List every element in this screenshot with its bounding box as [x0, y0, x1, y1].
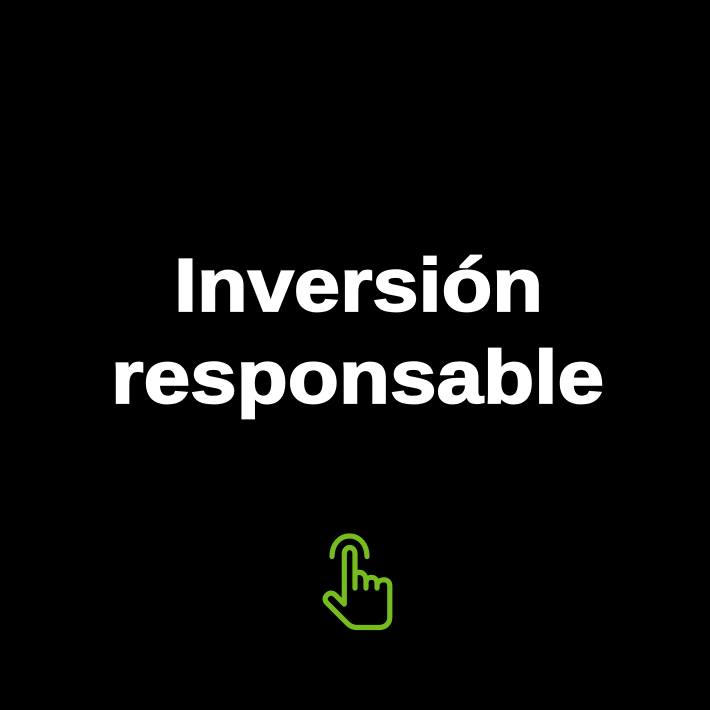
title: responsable — [111, 335, 604, 419]
icon: pointing hand — [325, 536, 390, 628]
title — [111, 243, 604, 419]
title: Inversión — [174, 243, 543, 327]
